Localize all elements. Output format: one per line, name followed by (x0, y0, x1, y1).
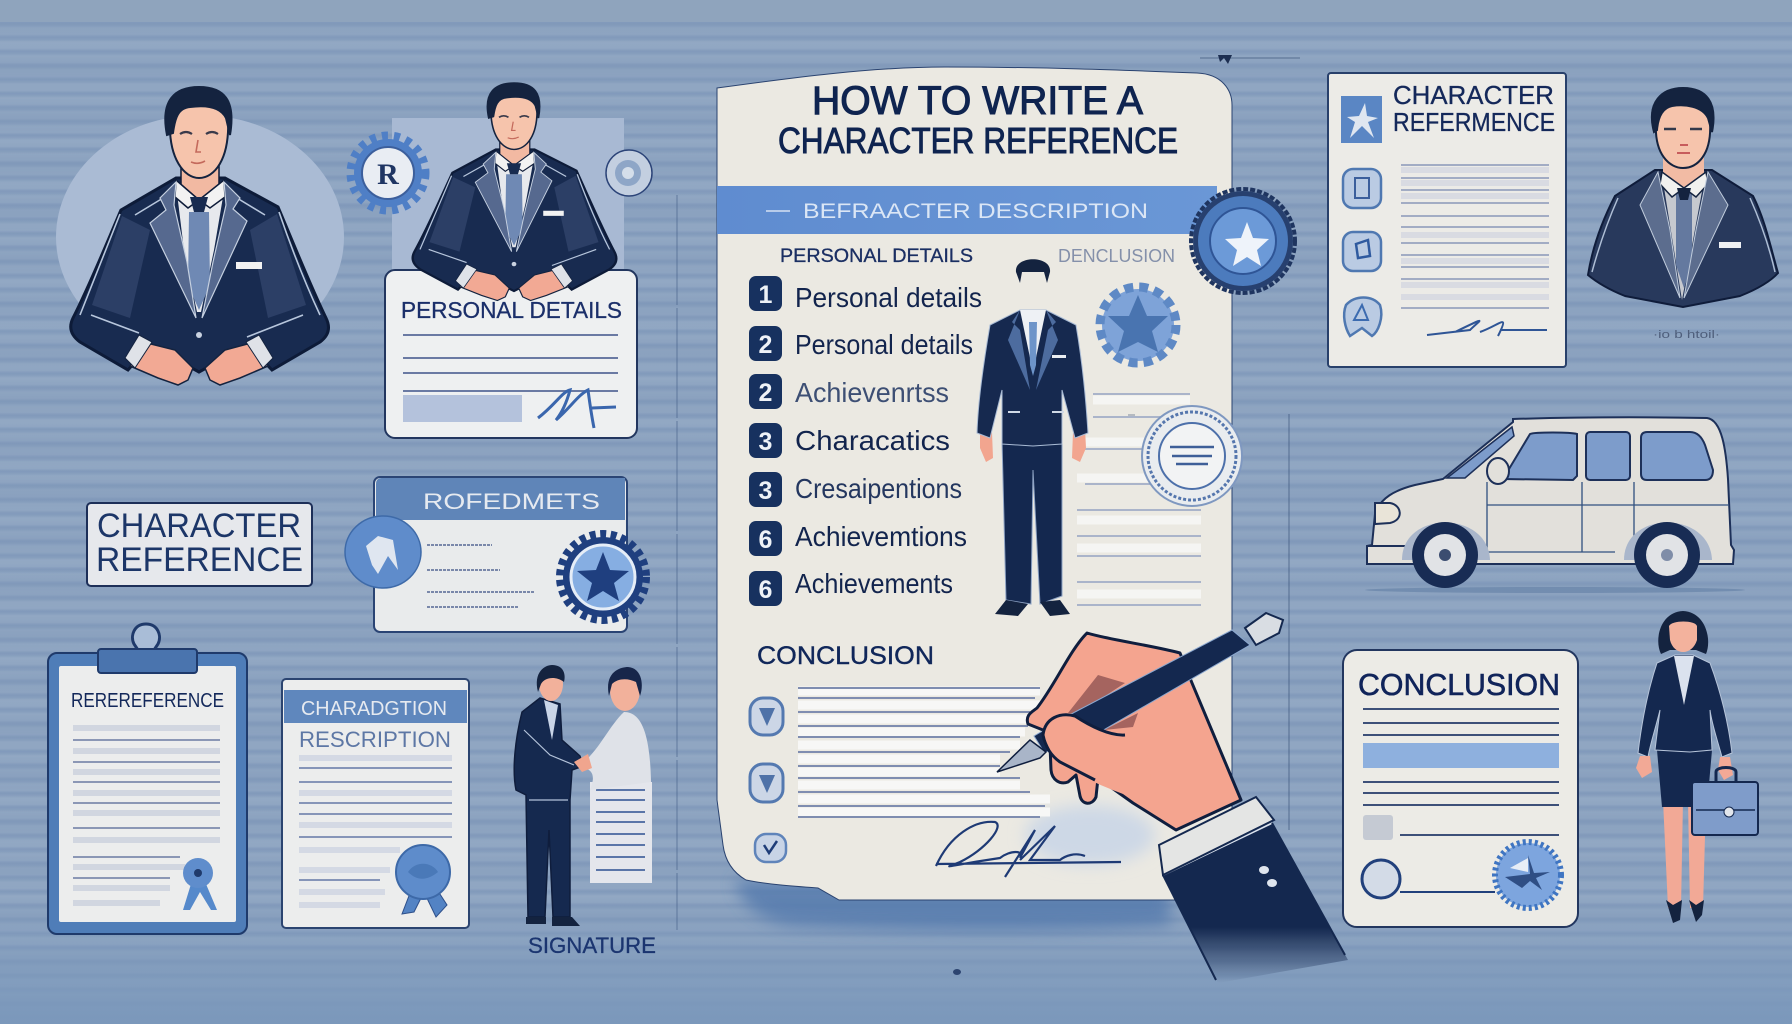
list item 4: 3 (759, 428, 772, 456)
list item 4 (749, 423, 950, 458)
section band: character description (717, 186, 1217, 234)
caption under bust: ·io b htoil· (1653, 329, 1720, 341)
panel: character reference document: REFERMENCE (1393, 107, 1555, 137)
text lines (1401, 170, 1549, 297)
list item 6: Achievemtions (795, 521, 967, 552)
panel: character reference tag: REFERENCE (96, 541, 303, 579)
list item 7: Achievements (795, 568, 953, 599)
icon: check 2 (750, 764, 783, 802)
panel: character reference tag: CHARACTER (97, 507, 301, 545)
list item 2: 2 (759, 331, 772, 359)
icon: star seal (1100, 287, 1176, 363)
subheading: personal details: PERSONAL DETAILS (780, 246, 973, 267)
list item 1 (749, 276, 982, 313)
list item 2 (749, 326, 973, 361)
heading: conclusion: CONCLUSION (757, 642, 934, 670)
text lines: conclusion (798, 688, 1050, 817)
icon: document tile (1343, 169, 1381, 208)
panel: conclusion card (1343, 650, 1578, 927)
illustration: hand writing with pen (997, 613, 1348, 983)
list item 5: Cresaipentions (795, 473, 962, 504)
icon: star badge (1344, 298, 1381, 336)
icon: square tile (1343, 232, 1381, 271)
title (778, 79, 1178, 161)
list item 6: 6 (759, 526, 772, 554)
panel: character description card: CHARADGTION (301, 698, 447, 720)
panel: clipboard reference: REREREFERENCE (71, 690, 224, 712)
backdrop behind second man (392, 118, 624, 273)
list item 5 (749, 472, 962, 507)
title: CHARACTER REFERENCE (778, 120, 1178, 161)
list item 3: 2 (759, 379, 772, 407)
panel: character reference document: CHARACTER (1393, 80, 1554, 110)
figure: handshake (514, 665, 652, 926)
icon: small round seal (606, 150, 652, 196)
icon: clipboard clip (98, 624, 197, 673)
icon: blue emblem (345, 516, 421, 588)
icon: star tile (1341, 96, 1382, 143)
icon: round stamp (1142, 406, 1242, 506)
list item 4: Characatics (795, 425, 950, 456)
list item 1: 1 (759, 281, 773, 309)
panel: character description card: RESCRIPTION (299, 727, 451, 752)
wheel: rear (1624, 522, 1712, 588)
icon: check 3 (755, 834, 786, 862)
figure: man in suit (514, 665, 592, 926)
list item 3: Achievenrtss (795, 377, 949, 408)
divider line (676, 195, 678, 930)
icon: round stamp (1362, 860, 1400, 898)
panel: main document (717, 67, 1295, 931)
thumb (1043, 715, 1151, 800)
figure: businesswoman (1636, 611, 1758, 923)
icon: large star seal (1191, 189, 1295, 293)
list item 2: Personal details (795, 329, 973, 360)
icon: check 1 (750, 698, 783, 735)
small top ornament (1218, 55, 1232, 64)
signature (936, 822, 1121, 877)
wheel: front (1402, 522, 1490, 588)
label: signature: SIGNATURE (528, 933, 656, 958)
icon: briefcase (1692, 768, 1758, 835)
palm shadow (1068, 675, 1138, 730)
heading: personal details: PERSONAL DETAILS (401, 297, 622, 323)
title: HOW TO WRITE A (812, 79, 1143, 123)
signature (1427, 321, 1547, 336)
text lines beside figure (1077, 394, 1201, 605)
panel: character reference document (1328, 73, 1566, 367)
list item 3 (749, 374, 949, 409)
illustration: van (1365, 417, 1745, 593)
icon: star seal (560, 534, 646, 620)
list item 6 (749, 521, 967, 556)
figure: suit illustration (977, 259, 1088, 616)
cuff (1159, 797, 1274, 875)
figure: man behind card (413, 83, 616, 301)
decorative marks (1128, 58, 1300, 830)
small bottom ornament (953, 969, 961, 975)
stipple shadow (1025, 805, 1155, 865)
figure: man bust (1588, 88, 1778, 307)
icon: R badge (351, 136, 425, 210)
figure: woman with document (584, 667, 652, 883)
panel: rofedmets card: ROFEDMETS (423, 489, 600, 514)
panel: character description card (282, 679, 469, 928)
list item 7 (749, 568, 953, 606)
list item 5: 3 (759, 477, 772, 505)
icon: ribbon (183, 858, 217, 910)
subheading: conclusion: DENCLUSION (1058, 246, 1175, 266)
sleeve (1163, 823, 1348, 983)
figure: man in circle (56, 87, 344, 385)
panel: conclusion card: CONCLUSION (1358, 667, 1560, 702)
pen (997, 613, 1283, 772)
panel: personal details card (385, 270, 637, 438)
hand (1027, 633, 1241, 830)
numbered list (749, 276, 982, 606)
icon: R badge: R (377, 158, 399, 191)
icon: star seal (1495, 842, 1561, 908)
list item 1: Personal details (795, 282, 982, 313)
panel: clipboard reference (48, 624, 247, 934)
icon: rosette (396, 845, 450, 917)
section band: character description: BEFRAACTER DESCRIPTION (803, 200, 1148, 223)
list item 7: 6 (759, 576, 772, 604)
icon: signature (538, 390, 616, 428)
panel: rofedmets card (345, 477, 646, 632)
panel: character reference tag (87, 503, 312, 586)
